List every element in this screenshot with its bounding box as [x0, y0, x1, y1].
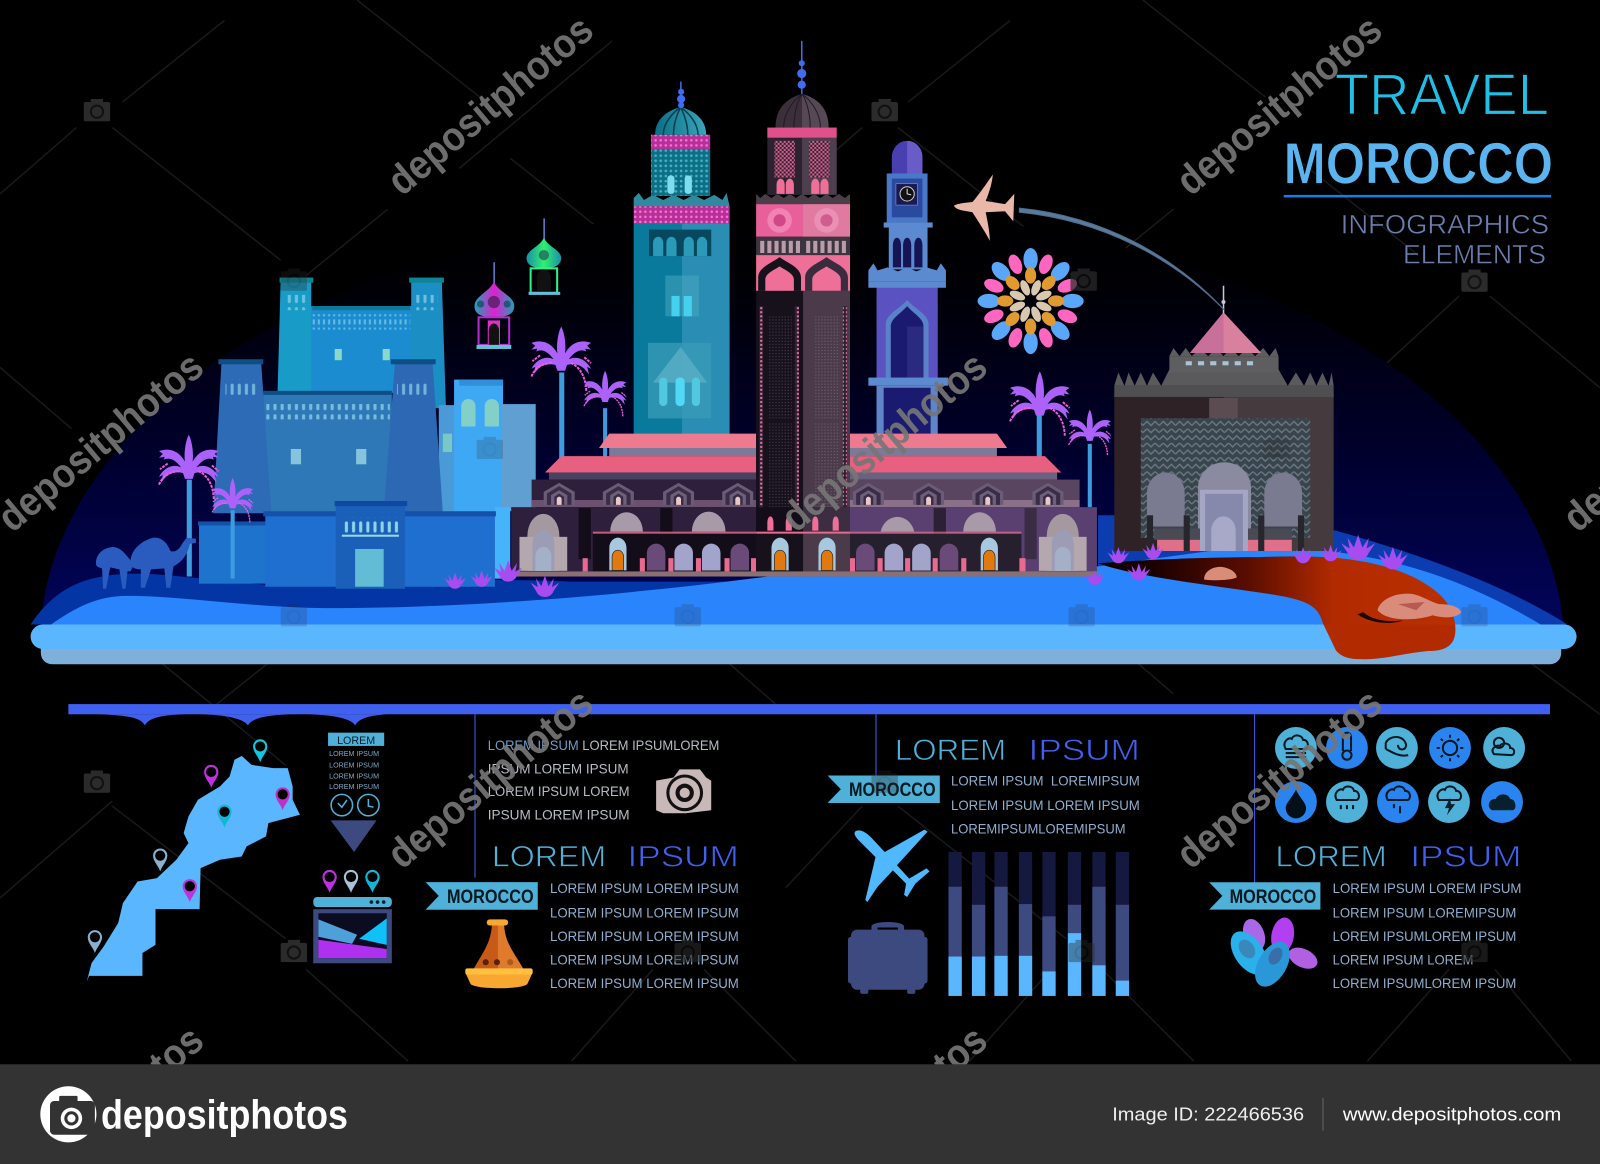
icon: pink airplane	[954, 174, 1014, 241]
header rule with scallops	[68, 704, 1550, 884]
flight arc	[1019, 208, 1224, 310]
red sea inlet	[1098, 556, 1455, 659]
icon: suitcase	[848, 922, 928, 994]
text lines: LOREM IPSUM LOREM IPSUM	[550, 881, 739, 897]
title: MOROCCO: MOROCCO	[1284, 132, 1553, 197]
map pins	[88, 739, 290, 953]
icon: clocks	[331, 794, 379, 816]
camels	[96, 538, 196, 589]
sidebar: lorem legend: LOREM IPSUM	[329, 783, 379, 791]
ocean base band	[31, 624, 1577, 664]
sidebar: lorem legend: LOREM IPSUM	[329, 750, 379, 758]
night sky dome	[41, 209, 1563, 624]
footer bar	[0, 1064, 1600, 1164]
text lines: LOREM IPSUM LOREMIPSUM	[951, 774, 1140, 790]
heading: LOREM	[492, 840, 606, 873]
hall roofs	[545, 434, 1061, 480]
ribbon: MOROCCO: MOROCCO	[1230, 886, 1316, 908]
text lines: LOREM IPSUM LOREM IPSUM	[550, 905, 739, 921]
footer logo	[40, 1086, 348, 1142]
heading	[492, 840, 739, 873]
ribbon: MOROCCO	[828, 776, 940, 803]
text lines: LOREM IPSUM LOREMIPSUM	[1333, 905, 1516, 921]
panel: flights	[828, 734, 1140, 996]
kasbah front section	[213, 359, 443, 513]
icon: triangle marker	[331, 820, 377, 852]
ribbon: MOROCCO: MOROCCO	[447, 886, 534, 908]
hall walls	[511, 480, 1097, 571]
hall arcade	[519, 512, 1087, 571]
kasbah right towers	[439, 380, 536, 579]
heading: IPSUM	[1029, 734, 1140, 767]
ribbon: MOROCCO	[1209, 882, 1320, 910]
text lines: LOREM IPSUM LOREM IPSUM	[951, 798, 1140, 814]
heading	[1276, 840, 1521, 873]
sidebar: lorem legend: LOREM IPSUM	[329, 761, 379, 769]
sidebar: lorem legend: LOREM IPSUM	[329, 773, 379, 781]
panel: camera text: LOREM IPSUM LOREM	[488, 784, 630, 800]
panel: camera text	[488, 738, 719, 823]
heading: LOREM	[895, 734, 1006, 767]
heading	[895, 734, 1140, 767]
footer logo: depositphotos	[101, 1092, 348, 1138]
text lines: LOREM IPSUMLOREM IPSUM	[1333, 976, 1516, 992]
panel: camera text: IPSUM LOREM IPSUM	[488, 761, 629, 777]
clock tower	[868, 141, 948, 437]
text lines: LOREM IPSUM LOREM	[1333, 952, 1473, 968]
heading: IPSUM	[628, 840, 739, 873]
panel: tagine	[426, 840, 739, 992]
heading: LOREM	[1276, 840, 1387, 873]
heading: IPSUM	[1410, 840, 1521, 873]
text lines: LOREM IPSUM LOREM IPSUM	[550, 929, 739, 945]
map of Morocco	[87, 739, 300, 982]
bar chart	[948, 852, 1129, 996]
text lines: LOREMIPSUMLOREMIPSUM	[951, 822, 1126, 838]
rose window ornament	[978, 248, 1084, 354]
weather icons	[1275, 727, 1525, 823]
ground: dark blue dunes	[31, 515, 1567, 624]
Hassan II mosque hall	[511, 434, 1097, 571]
text lines: LOREM IPSUM LOREM IPSUM	[550, 952, 739, 968]
panel: slippers	[1209, 840, 1521, 993]
kasbah fortress	[198, 278, 536, 589]
panel: camera text: LOREM IPSUM LOREM IPSUMLOREM	[488, 738, 719, 754]
lantern: pink	[474, 262, 514, 349]
watermarks: depositphotos	[1167, 679, 1390, 877]
icon: slippers	[1223, 916, 1321, 993]
pins row and browser icon	[313, 870, 392, 963]
title: TRAVEL: TRAVEL	[1335, 62, 1549, 127]
text lines	[550, 881, 739, 992]
footer url: www.depositphotos.com	[1342, 1103, 1561, 1124]
subtitle	[1341, 210, 1549, 269]
icon: camera	[656, 769, 711, 813]
watermark cameras	[84, 99, 1488, 962]
ribbon: MOROCCO: MOROCCO	[849, 779, 936, 801]
rocks	[1204, 567, 1461, 623]
palm trees around kasbah	[159, 327, 1111, 579]
title block	[1284, 62, 1553, 269]
ground: bright blue shore	[51, 548, 1541, 624]
Koutoubia minaret	[634, 82, 730, 438]
lantern: green	[527, 218, 561, 295]
text lines	[951, 774, 1140, 838]
footer image id: Image ID: 222466536	[1112, 1103, 1304, 1124]
ribbon: MOROCCO	[426, 882, 538, 910]
watermarks: depositphotos	[378, 679, 602, 877]
Hassan II minaret	[756, 41, 850, 577]
text lines: LOREM IPSUMLOREM IPSUM	[1333, 929, 1516, 945]
icon: blue airplane	[855, 830, 930, 902]
subtitle: ELEMENTS	[1403, 239, 1546, 269]
flying lanterns	[474, 218, 561, 349]
watermarks: depositphotos	[772, 343, 996, 541]
text lines	[1333, 881, 1521, 992]
royal mausoleum	[1114, 286, 1334, 551]
panel: camera text: IPSUM LOREM IPSUM	[488, 807, 630, 823]
kasbah back section	[278, 278, 446, 408]
subtitle: INFOGRAPHICS	[1341, 210, 1549, 240]
sidebar: lorem legend: LOREM	[337, 735, 375, 747]
text lines: LOREM IPSUM LOREM IPSUM	[550, 976, 739, 992]
sidebar: lorem legend	[328, 733, 384, 852]
kasbah gate and walls	[198, 501, 496, 589]
agave plants	[444, 535, 1408, 597]
icon: tagine	[465, 919, 533, 988]
text lines: LOREM IPSUM LOREM IPSUM	[1333, 881, 1521, 897]
